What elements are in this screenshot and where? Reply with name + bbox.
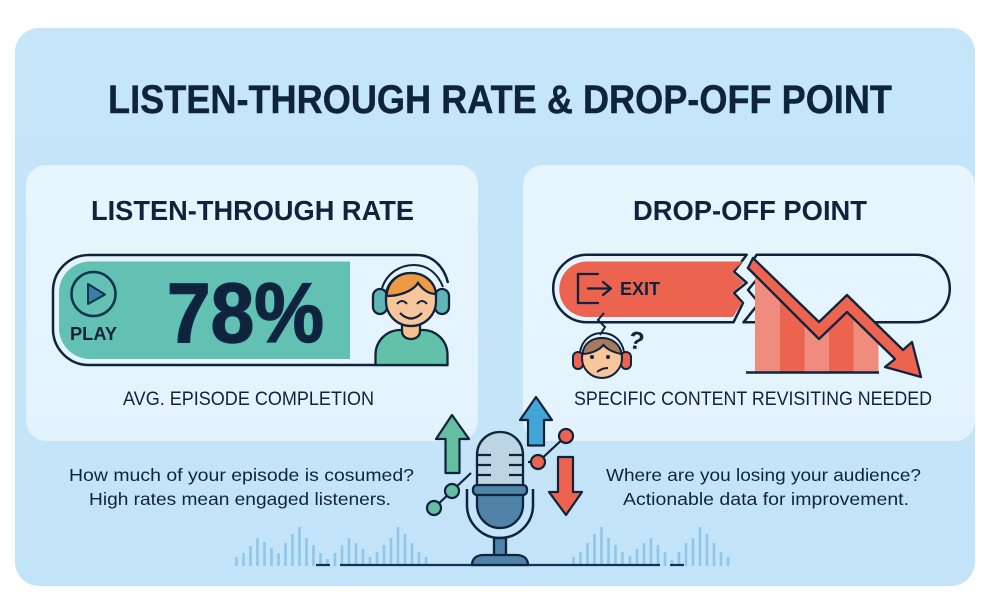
bar fill [559,262,744,317]
icon: green node line [427,473,471,515]
waveform: right [574,527,728,566]
broken progress bar [553,255,950,322]
arrow: falling trend [748,258,921,377]
bar chart [746,276,879,372]
icon: play button [72,272,116,316]
text block: right question: Actionable data for improvement. [623,489,909,509]
arrow: red down [549,457,582,515]
text block: right question: Where are you losing your audience? [606,465,921,485]
waveform: left [236,527,426,566]
baseline [316,564,684,566]
icon: smiling listener [373,265,449,365]
icon: red node line [528,429,573,469]
caption: avg. episode completion: AVG. EPISODE COMPLETION [123,389,374,410]
text block: left question: How much of your episode is cosumed? [69,465,414,485]
play label: PLAY [70,323,118,344]
progress bar [53,255,448,365]
icon: microphone [467,432,533,565]
panel: drop-off point [523,165,975,441]
bar fill [59,262,350,359]
arrow: green up [436,415,469,473]
text block: right question [606,465,921,509]
heading: drop-off point: DROP-OFF POINT [633,195,867,226]
exit label: EXIT [620,278,661,299]
heading: listen-through rate: LISTEN-THROUGH RATE [91,195,414,226]
icon: confused listener [573,313,631,378]
title: LISTEN-THROUGH RATE & DROP-OFF POINT [108,78,892,122]
text block: left question: High rates mean engaged listeners. [89,489,391,509]
icon: exit door [578,274,611,303]
arrow: blue up [520,397,552,446]
text block: left question [69,465,414,509]
icon: question mark: ? [626,326,646,356]
caption: specific content revisiting needed: SPECIFIC CONTENT REVISITING NEEDED [574,389,932,410]
value: 78%: 78% [167,266,324,360]
panel: listen-through rate [26,165,478,441]
